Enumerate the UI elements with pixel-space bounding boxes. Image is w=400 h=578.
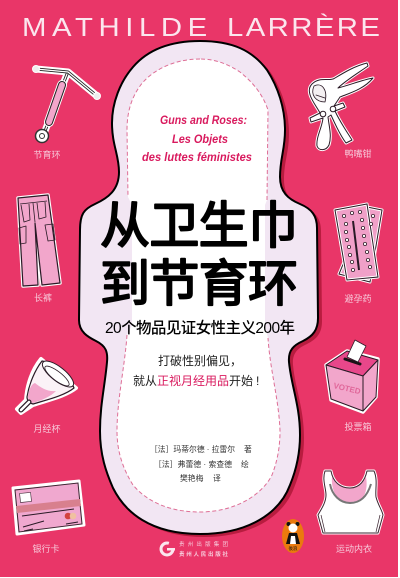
credits: 樊艳梅 bbox=[180, 473, 204, 483]
tagline: 打破性别偏见， bbox=[158, 353, 242, 368]
icon: pill packs bbox=[335, 204, 382, 282]
subtitle French: Guns and Roses: bbox=[160, 113, 247, 127]
publisher name: 贵州出版集团 bbox=[179, 540, 228, 548]
author name bbox=[22, 13, 380, 42]
credits: ［法］弗蕾德 · 索查德 bbox=[154, 459, 232, 469]
icon: ballot box: VOTED bbox=[333, 381, 362, 396]
label: menstrual cup: 月经杯 bbox=[33, 423, 61, 434]
sanitary pad shape bbox=[79, 41, 322, 537]
tagline: 就从正视月经用品开始! bbox=[133, 373, 259, 388]
icon: panda logo bbox=[282, 519, 304, 553]
main title bbox=[100, 198, 298, 312]
subtitle French: Les Objets bbox=[172, 132, 228, 146]
credits: ［法］玛蒂尔德 · 拉雷尔 bbox=[150, 444, 235, 454]
icon: menstrual cup bbox=[17, 357, 77, 413]
label: pill packs: 避孕药 bbox=[344, 293, 372, 304]
label: bank card: 银行卡 bbox=[32, 543, 60, 554]
subtitle French: des luttes féministes bbox=[142, 150, 252, 164]
label: sports bra: 运动内衣 bbox=[336, 543, 372, 554]
credits: 著 bbox=[244, 444, 252, 454]
label: speculum: 鸭嘴钳 bbox=[344, 148, 372, 159]
label: IUD: 节育环 bbox=[33, 149, 61, 160]
icon: speculum bbox=[309, 63, 373, 150]
publisher name: 贵州人民出版社 bbox=[179, 550, 228, 558]
credits bbox=[150, 444, 252, 483]
icon: bank card bbox=[13, 481, 84, 534]
label: ballot box: 投票箱 bbox=[344, 421, 372, 432]
icon: ballot box bbox=[326, 340, 378, 412]
subtitle French bbox=[142, 113, 252, 164]
icon: publisher logo bbox=[161, 543, 175, 555]
subtitle Chinese: 20个物品见证女性主义200年 bbox=[105, 318, 295, 337]
publisher name bbox=[179, 540, 228, 558]
icon: sports bra bbox=[318, 471, 383, 533]
author name: LARRÈRE bbox=[227, 13, 380, 42]
icon: panda logo: 後浪 bbox=[288, 545, 298, 552]
label: trousers: 长裤 bbox=[34, 292, 52, 303]
credits: 绘 bbox=[241, 459, 249, 469]
credits: 译 bbox=[213, 474, 221, 483]
main title: 到节育环 bbox=[100, 256, 298, 312]
author name: MATHILDE bbox=[22, 13, 207, 42]
tagline bbox=[133, 353, 259, 388]
main title: 从卫生巾 bbox=[100, 198, 298, 254]
icon: IUD bbox=[32, 66, 100, 142]
icon: trousers bbox=[18, 195, 60, 286]
